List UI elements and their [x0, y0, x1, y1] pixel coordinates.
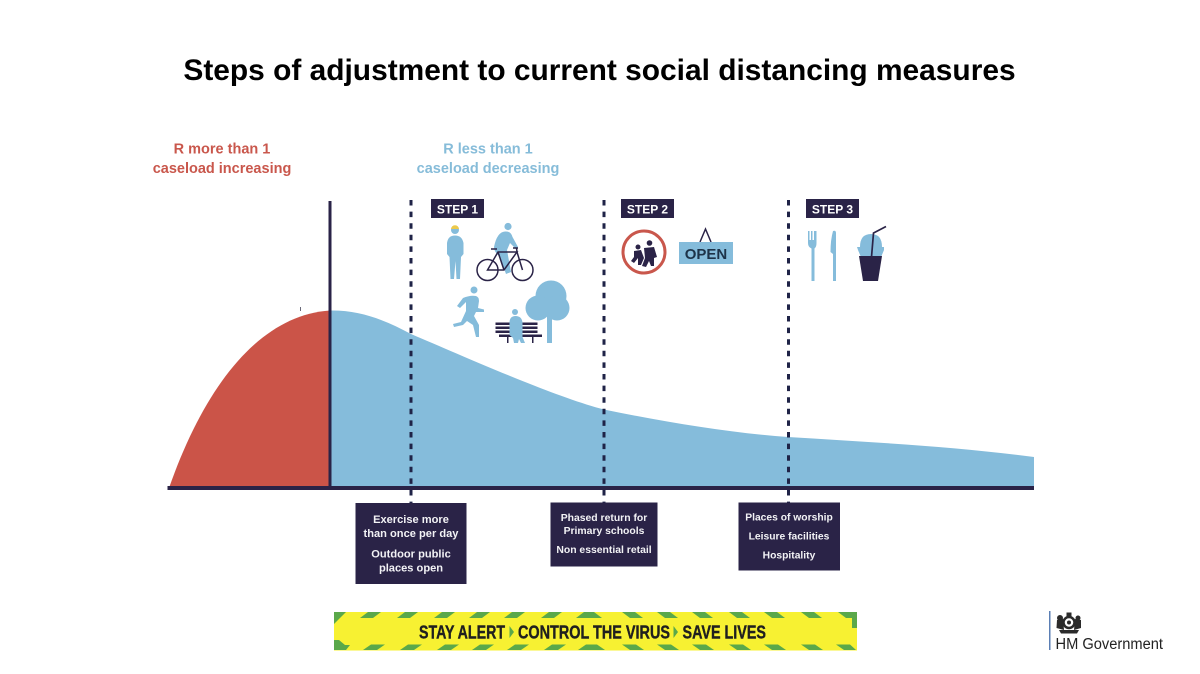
- banner: stay alert slogan: STAY ALERT: [419, 622, 505, 642]
- heading: R more than 1: [153, 142, 291, 177]
- label: step 2: [621, 199, 674, 218]
- banner: stay alert slogan: CONTROL THE VIRUS: [518, 622, 670, 642]
- callout: step 2 measures: [550, 502, 658, 566]
- icon: open sign: OPEN: [685, 246, 727, 263]
- icon: bench and tree: [496, 280, 570, 343]
- chart: red rising curve: [169, 310, 330, 488]
- banner: stay alert slogan: SAVE LIVES: [682, 622, 766, 642]
- callout: step 2 measures: Primary schools: [564, 526, 645, 537]
- callout: step 3 measures: Leisure facilities: [749, 532, 830, 542]
- icon: fork: [808, 231, 816, 281]
- chart: baseline axis: [168, 486, 1034, 490]
- chart: blue falling curve: [330, 310, 1034, 488]
- label: step 2: STEP 2: [627, 202, 668, 216]
- label: step 3: [806, 199, 859, 218]
- icon: knife: [830, 231, 836, 281]
- heading: R less than 1: R less than 1: [443, 142, 533, 158]
- icon: runner: [453, 286, 484, 337]
- label: step 1: STEP 1: [437, 202, 478, 216]
- callout: step 1 measures: places open: [379, 562, 443, 574]
- dashed line: step 1: [410, 200, 412, 503]
- heading: R less than 1: caseload decreasing: [417, 161, 559, 177]
- heading: R less than 1: [417, 142, 559, 177]
- logo: HM Government: [1049, 611, 1164, 653]
- heading: R more than 1: caseload increasing: [153, 161, 291, 177]
- icon: cyclist: [477, 223, 533, 280]
- dashed line: step 2: [602, 200, 606, 503]
- chart: small tick: [300, 307, 301, 311]
- label: step 3: STEP 3: [812, 202, 853, 216]
- callout: step 2 measures: Phased return for: [561, 513, 647, 524]
- icon: open sign: [679, 229, 733, 264]
- callout: step 1 measures: than once per day: [364, 528, 459, 540]
- icon: construction worker: [447, 225, 464, 279]
- icon: takeaway drink: [857, 226, 886, 281]
- callout: step 1 measures: Exercise more: [373, 514, 449, 526]
- callout: step 1 measures: Outdoor public: [371, 548, 451, 560]
- heading: R more than 1: R more than 1: [174, 142, 270, 158]
- dashed line: step 3: [787, 200, 790, 503]
- crest: [1056, 612, 1081, 634]
- callout: step 2 measures: Non essential retail: [556, 545, 652, 556]
- callout: step 3 measures: [738, 502, 840, 570]
- callout: step 1 measures: [356, 503, 466, 584]
- logo: HM Government: HM Government: [1056, 636, 1164, 653]
- banner stripes: [334, 612, 857, 650]
- icon: school children sign: [623, 231, 665, 273]
- banner: stay alert slogan: [334, 612, 857, 650]
- title: Steps of adjustment to current social distancing measures: [183, 54, 1016, 87]
- callout: step 3 measures: Places of worship: [745, 512, 833, 524]
- chart: vertical peak line: [328, 201, 332, 489]
- label: step 1: [431, 199, 484, 218]
- callout: step 3 measures: Hospitality: [763, 550, 816, 562]
